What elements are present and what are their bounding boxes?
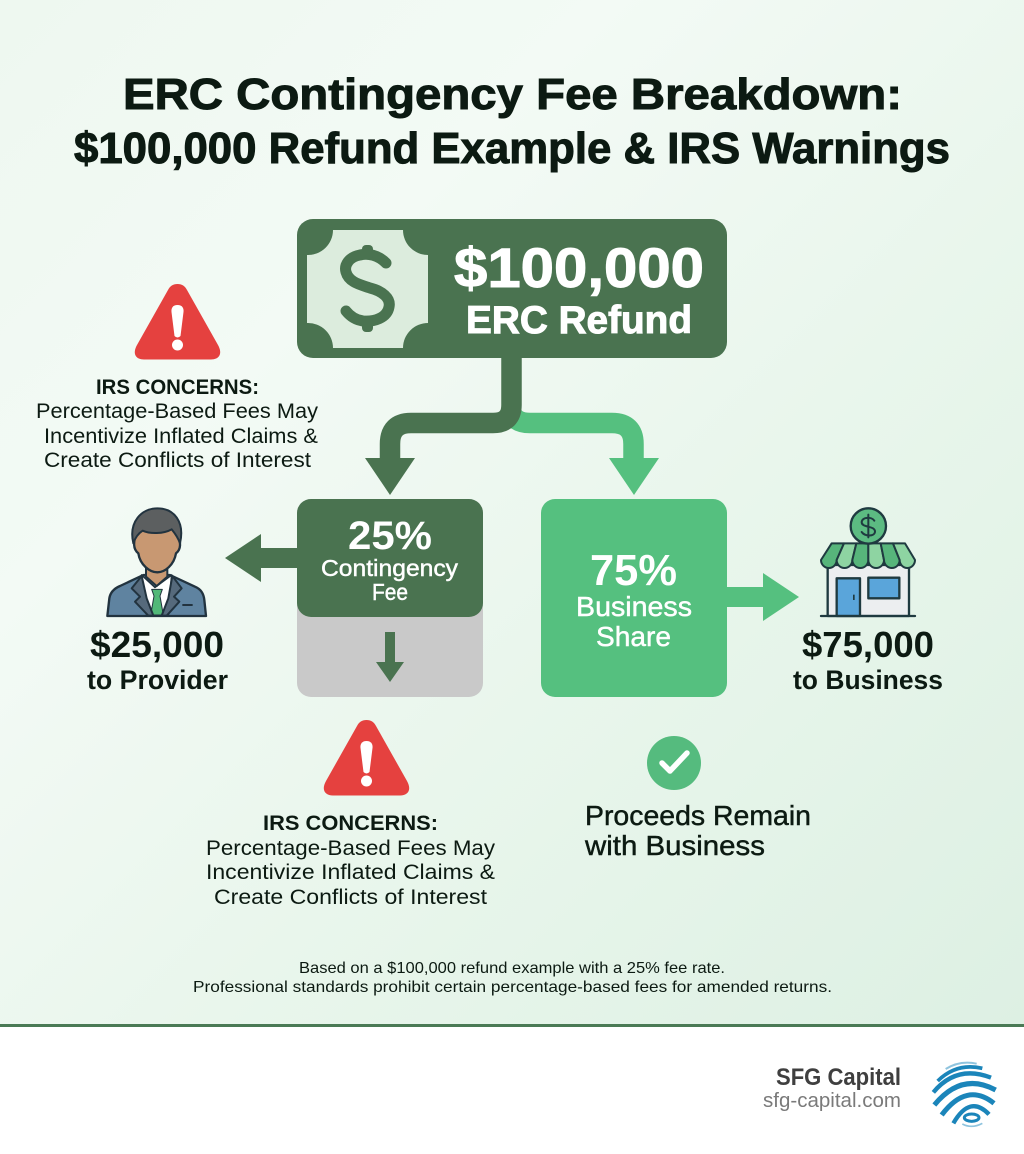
fee label: 25% bbox=[348, 514, 432, 558]
title bbox=[74, 70, 950, 173]
text: proceeds remain with business: with Business bbox=[584, 830, 765, 861]
arrow: to business bbox=[727, 573, 799, 621]
text: IRS concerns bottom: Incentivize Inflated Claims & bbox=[206, 861, 495, 884]
arrow: to provider bbox=[225, 534, 297, 582]
text: $25,000 to provider bbox=[87, 624, 228, 695]
footnote bbox=[193, 960, 832, 996]
text: IRS concerns left bbox=[36, 376, 319, 472]
brand text bbox=[763, 1064, 901, 1112]
text: proceeds remain with business: Proceeds Remain bbox=[585, 800, 811, 831]
brand text: SFG Capital bbox=[776, 1064, 901, 1091]
refund amount: ERC Refund bbox=[466, 299, 692, 342]
text: IRS concerns left: Percentage-Based Fees May bbox=[36, 400, 319, 423]
fee label: Contingency bbox=[321, 555, 459, 581]
icon: storefront bbox=[821, 508, 915, 616]
fee label: Fee bbox=[372, 579, 408, 605]
text: IRS concerns bottom: Percentage-Based Fees May bbox=[206, 837, 496, 860]
icon: provider bbox=[107, 508, 206, 616]
title: $100,000 Refund Example & IRS Warnings bbox=[74, 124, 950, 173]
text: $75,000 to business bbox=[793, 624, 943, 695]
brand text: sfg-capital.com bbox=[763, 1090, 901, 1112]
arrow: dark branch to contingency fee bbox=[365, 350, 512, 495]
text: IRS concerns left: Create Conflicts of Interest bbox=[44, 449, 311, 472]
panel: 25% contingency fee bbox=[297, 499, 483, 697]
footnote: Professional standards prohibit certain percentage-based fees for amended returns. bbox=[193, 979, 832, 996]
panel: $100,000 ERC refund bbox=[297, 219, 727, 358]
icon: check circle bbox=[647, 736, 701, 790]
icon: globe logo bbox=[933, 1063, 996, 1126]
text: IRS concerns bottom: IRS CONCERNS: bbox=[263, 812, 438, 835]
refund amount: $100,000 bbox=[454, 236, 704, 299]
text: IRS concerns left: Incentivize Inflated Claims & bbox=[44, 425, 318, 448]
footnote: Based on a $100,000 refund example with a 25% fee rate. bbox=[299, 960, 725, 977]
text: IRS concerns bottom bbox=[206, 812, 496, 909]
icon: dollar bill bbox=[307, 230, 428, 348]
arrow: green branch to business share bbox=[511, 410, 659, 495]
panel: 75% business share: Business bbox=[576, 591, 692, 622]
panel: 75% business share: 75% bbox=[590, 546, 677, 595]
panel: 75% business share bbox=[541, 499, 727, 697]
panel: 75% business share: Share bbox=[596, 621, 671, 652]
title: ERC Contingency Fee Breakdown: bbox=[123, 70, 902, 119]
text: $75,000 to business: $75,000 bbox=[802, 624, 934, 665]
text: $25,000 to provider: $25,000 bbox=[90, 624, 224, 665]
text: proceeds remain with business bbox=[584, 800, 811, 861]
text: $75,000 to business: to Business bbox=[793, 665, 943, 695]
fee label bbox=[321, 514, 459, 605]
refund amount bbox=[454, 236, 704, 342]
text: IRS concerns left: IRS CONCERNS: bbox=[96, 376, 259, 399]
text: IRS concerns bottom: Create Conflicts of Interest bbox=[214, 886, 487, 909]
arrow: down in grey box bbox=[376, 632, 404, 682]
icon: warning triangle left bbox=[135, 284, 220, 360]
icon: warning triangle bottom bbox=[324, 720, 409, 796]
text: $25,000 to provider: to Provider bbox=[87, 665, 228, 695]
